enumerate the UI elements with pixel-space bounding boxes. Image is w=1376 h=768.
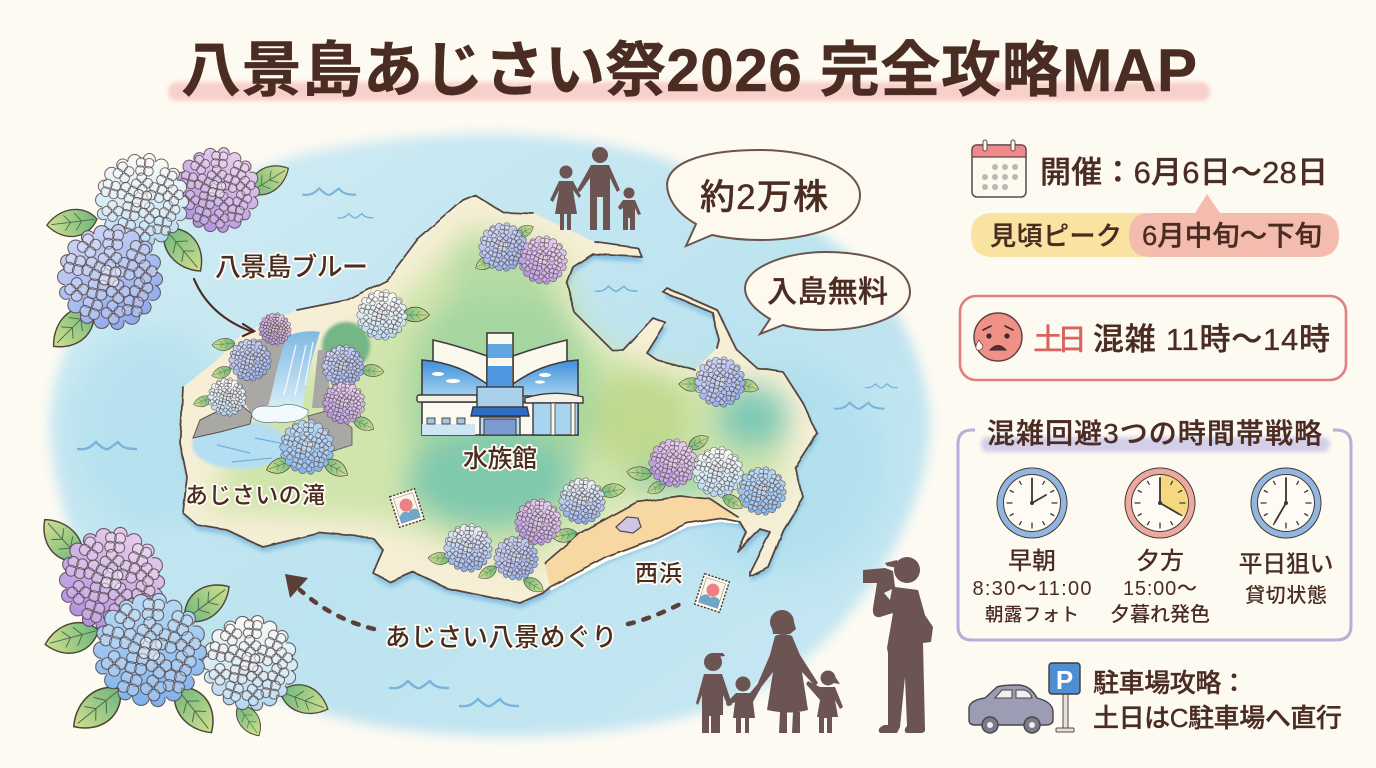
map: sea [50, 134, 930, 736]
silhouette: top family [550, 147, 641, 230]
bottom-left hydrangea cluster [33, 511, 333, 741]
stamp: west beach [695, 574, 729, 612]
text: evening: 夕方 [1136, 548, 1184, 575]
label: あじさいの滝: あじさいの滝 [185, 482, 325, 508]
panel heading: 混雑回避3つの時間帯戦略 [987, 418, 1322, 449]
icon: worried face [974, 313, 1022, 361]
info: dates with calendar icon: 開催：6月6日～28日 [1040, 155, 1328, 190]
icon: car and parking sign [969, 663, 1080, 733]
icon: car and parking sign: P [1056, 665, 1073, 695]
label: 水族館: 水族館 [463, 445, 537, 473]
island hydrangeas [208, 223, 786, 580]
text: early morning: 朝露フォト [985, 604, 1079, 625]
text: weekday: 貸切状態 [1245, 584, 1327, 607]
text: early morning [972, 548, 1092, 625]
info: weekend congestion box: 混雑 11時～14時 [1093, 322, 1330, 357]
info: parking: 駐車場攻略： [1093, 668, 1247, 698]
speech bubble: 約2万株 [667, 150, 860, 246]
text: evening: 15:00～ [1123, 578, 1197, 600]
clock: weekday [1250, 468, 1322, 538]
route: あじさい八景めぐり dashed arrow [285, 574, 682, 652]
text: early morning: 早朝 [1008, 548, 1056, 575]
island leaves [192, 221, 760, 596]
aquarium building [417, 333, 583, 435]
title: 八景島あじさい祭2026 完全攻略MAP [181, 37, 1197, 104]
top-left hydrangea cluster [44, 148, 294, 358]
info: parking [969, 663, 1342, 733]
label: 八景島ブルー with arrow [194, 252, 368, 336]
info: peak period pill: 6月中旬～下旬 [1142, 220, 1322, 251]
waterfall scene [192, 322, 370, 469]
info: peak period pill: 見頃ピーク [990, 221, 1122, 251]
text: weekday: 平日狙い [1238, 551, 1334, 578]
info: weekend congestion box [960, 296, 1346, 380]
info: peak period pill [971, 194, 1339, 257]
icon: calendar [972, 140, 1026, 197]
silhouette: bottom family [696, 610, 843, 733]
speech bubble: 約2万株: 約2万株 [700, 178, 828, 217]
waves [78, 188, 897, 706]
clock: evening [1124, 468, 1196, 538]
panel: time strategies [958, 418, 1351, 640]
speech bubble: 入島無料: 入島無料 [767, 276, 888, 309]
map: island [180, 195, 818, 608]
clock: early morning [996, 468, 1068, 538]
info: weekend congestion box: 土日 [1033, 324, 1087, 357]
text: early morning: 8:30～11:00 [972, 578, 1092, 600]
route: あじさい八景めぐり dashed arrow: あじさい八景めぐり [385, 624, 617, 652]
label: 八景島ブルー with arrow: 八景島ブルー [215, 252, 368, 282]
text: weekday [1238, 551, 1334, 607]
stamp: island [390, 489, 424, 527]
beach details: shell [616, 517, 641, 533]
text: evening [1110, 548, 1210, 626]
label: 西浜: 西浜 [635, 560, 682, 586]
info: parking: 土日はC駐車場へ直行 [1093, 703, 1342, 733]
speech bubble: 入島無料 [745, 252, 910, 334]
info: dates with calendar icon [972, 140, 1328, 197]
text: evening: 夕暮れ発色 [1110, 603, 1210, 626]
silhouette: photographer [863, 557, 933, 733]
